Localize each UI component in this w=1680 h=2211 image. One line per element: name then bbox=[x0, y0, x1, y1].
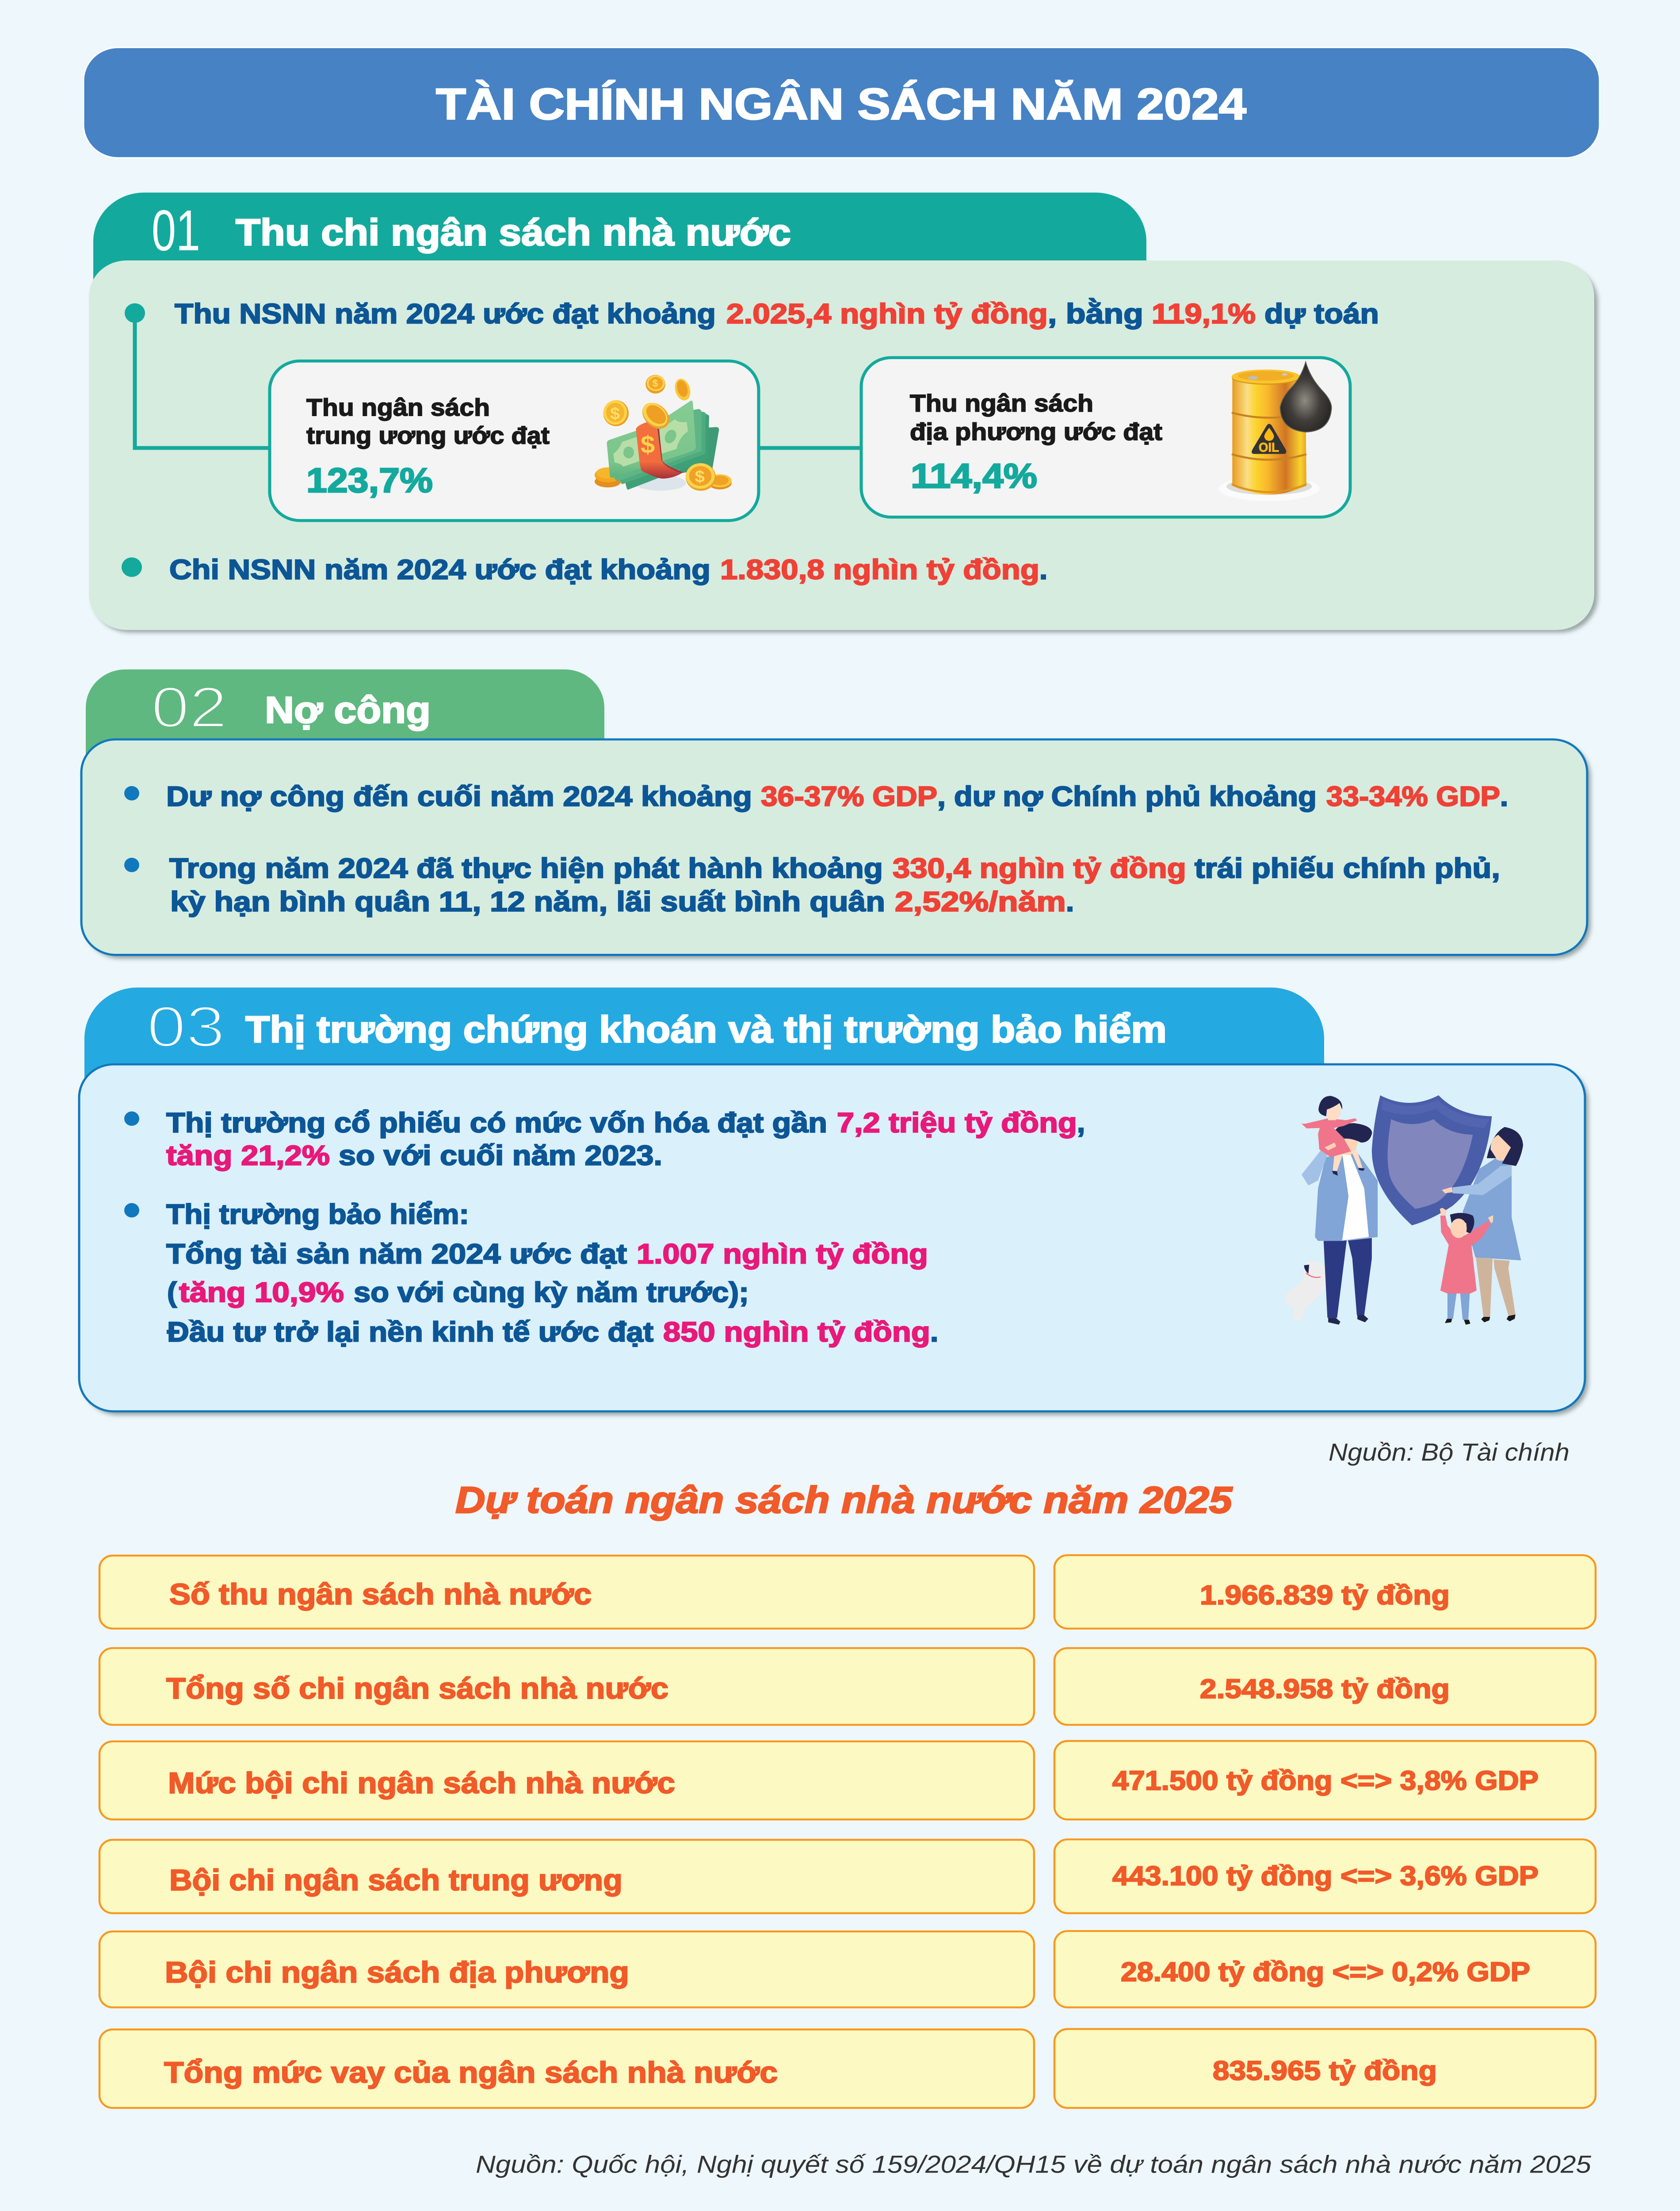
bullet: debt level bbox=[124, 786, 139, 800]
row: local deficit: Bội chi ngân sách địa phương bbox=[165, 1955, 629, 1989]
insurance market statement: . bbox=[930, 1316, 938, 1347]
illustration: family with shield bbox=[1284, 1095, 1523, 1325]
section 01 tab bbox=[93, 193, 1146, 280]
icon: money and coins: $ bbox=[653, 378, 658, 389]
bond issuance statement: . bbox=[1066, 886, 1074, 917]
expenditure statement: Chi NSNN năm 2024 ước đạt khoảng bbox=[169, 554, 710, 585]
row: central deficit: 443.100 tỷ đồng <=> 3,6% GDP bbox=[1112, 1861, 1539, 1891]
stock market statement: Thị trường cổ phiếu có mức vốn hóa đạt gần bbox=[166, 1107, 827, 1138]
insurance market statement bbox=[166, 1198, 938, 1347]
insurance market statement: tăng 10,9% bbox=[179, 1276, 344, 1308]
section 03 tab bbox=[84, 987, 1324, 1078]
revenue statement: 119,1% bbox=[1152, 298, 1256, 329]
budget table bbox=[99, 1555, 1596, 2108]
icon: money and coins bbox=[595, 375, 732, 491]
row: expenditure: Tổng số chi ngân sách nhà nước bbox=[166, 1672, 668, 1705]
row: total borrowing: Tổng mức vay của ngân sách nhà nước bbox=[164, 2056, 778, 2089]
section 02: public debt bbox=[81, 669, 1591, 959]
mother bbox=[1442, 1127, 1523, 1322]
title: TÀI CHÍNH NGÂN SÁCH NĂM 2024 bbox=[436, 79, 1246, 129]
stock market statement: so với cuối năm 2023. bbox=[339, 1140, 662, 1171]
icon: oil barrel and drop: OIL bbox=[1259, 440, 1279, 455]
shield bbox=[1372, 1095, 1492, 1225]
revenue statement: dự toán bbox=[1264, 298, 1379, 329]
source note: National Assembly resolution: Nguồn: Quốc hội, Nghị quyết số 159/2024/QH15 về dự toán ngân sách nhà nước năm 2025 bbox=[476, 2151, 1591, 2178]
card: local budget revenue bbox=[861, 358, 1350, 517]
stock market statement: 7,2 triệu tỷ đồng bbox=[837, 1107, 1077, 1138]
expenditure statement: 1.830,8 nghìn tỷ đồng bbox=[720, 554, 1039, 585]
insurance market statement: 850 nghìn tỷ đồng bbox=[663, 1316, 930, 1347]
heading: 2025 budget estimate: Dự toán ngân sách nhà nước năm 2025 bbox=[455, 1480, 1233, 1521]
row: local deficit: 28.400 tỷ đồng <=> 0,2% GDP bbox=[1121, 1957, 1530, 1987]
card: central budget revenue bbox=[270, 361, 759, 520]
insurance market statement: so với cùng kỳ năm trước); bbox=[354, 1276, 749, 1308]
debt level statement bbox=[166, 780, 1508, 812]
bond issuance statement: kỳ hạn bình quân 11, 12 năm, lãi suất bình quân bbox=[170, 886, 885, 917]
icon: money and coins: $ bbox=[610, 405, 620, 423]
bond issuance statement: Trong năm 2024 đã thực hiện phát hành khoảng bbox=[169, 852, 883, 884]
icon: money and coins: $ bbox=[695, 467, 705, 486]
section 03: stock and insurance markets bbox=[79, 987, 1588, 1415]
revenue statement: , bằng bbox=[1048, 298, 1143, 329]
section 02 heading: Nợ công bbox=[265, 689, 431, 731]
card text bbox=[910, 390, 1162, 495]
debt level statement: 33-34% GDP bbox=[1326, 780, 1500, 812]
child with raised arms bbox=[1440, 1208, 1493, 1325]
stock market statement: tăng 21,2% bbox=[166, 1140, 330, 1171]
card text: trung ương ước đạt bbox=[306, 422, 550, 449]
title banner bbox=[84, 47, 1600, 158]
dog bbox=[1284, 1261, 1330, 1320]
section 02 number: 02 bbox=[151, 675, 227, 740]
bullet: revenue bbox=[125, 303, 145, 323]
section 01 heading: Thu chi ngân sách nhà nước bbox=[236, 212, 791, 253]
row: central deficit bbox=[99, 1840, 1596, 1913]
row: deficit: Mức bội chi ngân sách nhà nước bbox=[168, 1766, 675, 1800]
insurance market statement: ( bbox=[167, 1276, 177, 1308]
stock market statement: , bbox=[1077, 1107, 1085, 1138]
bond issuance statement: trái phiếu chính phủ, bbox=[1195, 852, 1500, 884]
section 03 heading: Thị trường chứng khoán và thị trường bảo hiểm bbox=[245, 1009, 1167, 1051]
stock market statement bbox=[166, 1107, 1085, 1171]
bullet: insurance market bbox=[124, 1203, 139, 1217]
bullet: bond issuance bbox=[124, 858, 139, 872]
bond issuance statement bbox=[169, 852, 1500, 917]
revenue statement: 2.025,4 nghìn tỷ đồng bbox=[726, 298, 1048, 329]
panel 02 bbox=[81, 739, 1587, 955]
insurance market statement: Thị trường bảo hiểm: bbox=[166, 1198, 469, 1230]
bullet: expenditure bbox=[122, 558, 142, 577]
row: expenditure: 2.548.958 tỷ đồng bbox=[1200, 1674, 1450, 1704]
icon: oil barrel and drop bbox=[1219, 362, 1332, 501]
row: revenue: Số thu ngân sách nhà nước bbox=[169, 1577, 592, 1611]
insurance market statement: Đầu tư trở lại nền kinh tế ước đạt bbox=[167, 1316, 653, 1347]
section 01: state budget revenue and expenditure bbox=[89, 193, 1598, 632]
row: deficit: 471.500 tỷ đồng <=> 3,8% GDP bbox=[1112, 1766, 1539, 1796]
row: revenue: 1.966.839 tỷ đồng bbox=[1200, 1580, 1450, 1610]
expenditure statement bbox=[169, 554, 1047, 585]
child on shoulders bbox=[1302, 1096, 1365, 1176]
section 01 number: 01 bbox=[152, 199, 200, 263]
expenditure statement: . bbox=[1039, 554, 1047, 585]
insurance market statement: 1.007 nghìn tỷ đồng bbox=[637, 1238, 928, 1270]
debt level statement: Dư nợ công đến cuối năm 2024 khoảng bbox=[166, 780, 752, 812]
source note: Ministry of Finance: Nguồn: Bộ Tài chính bbox=[1329, 1439, 1569, 1466]
icon: money and coins: $ bbox=[641, 432, 655, 459]
panel 01 bbox=[89, 260, 1594, 630]
card text: 114,4% bbox=[911, 457, 1037, 495]
card text: Thu ngân sách bbox=[910, 390, 1093, 417]
section 02 tab bbox=[86, 669, 604, 755]
bullet: stock market bbox=[124, 1111, 139, 1126]
section 03 number: 03 bbox=[147, 995, 225, 1059]
row: central deficit: Bội chi ngân sách trung ương bbox=[169, 1863, 622, 1897]
card text bbox=[306, 394, 550, 499]
debt level statement: . bbox=[1500, 780, 1508, 812]
card text: địa phương ước đạt bbox=[910, 418, 1162, 445]
bond issuance statement: 2,52%/năm bbox=[895, 886, 1066, 917]
card text: Thu ngân sách bbox=[306, 394, 490, 421]
bond issuance statement: 330,4 nghìn tỷ đồng bbox=[893, 852, 1186, 884]
insurance market statement: Tổng tài sản năm 2024 ước đạt bbox=[166, 1238, 627, 1270]
father bbox=[1302, 1123, 1378, 1325]
row: local deficit bbox=[99, 1931, 1596, 2008]
row: deficit bbox=[99, 1741, 1596, 1820]
revenue statement: Thu NSNN năm 2024 ước đạt khoảng bbox=[175, 298, 716, 329]
card text: 123,7% bbox=[306, 461, 433, 499]
panel 03 bbox=[79, 1064, 1585, 1412]
debt level statement: , dư nợ Chính phủ khoảng bbox=[937, 780, 1317, 812]
connector lines bbox=[135, 313, 862, 448]
revenue statement bbox=[175, 298, 1379, 329]
row: total borrowing bbox=[99, 2029, 1596, 2108]
row: total borrowing: 835.965 tỷ đồng bbox=[1213, 2056, 1437, 2086]
row: expenditure bbox=[99, 1648, 1596, 1725]
row: revenue bbox=[99, 1555, 1596, 1629]
debt level statement: 36-37% GDP bbox=[761, 780, 937, 812]
